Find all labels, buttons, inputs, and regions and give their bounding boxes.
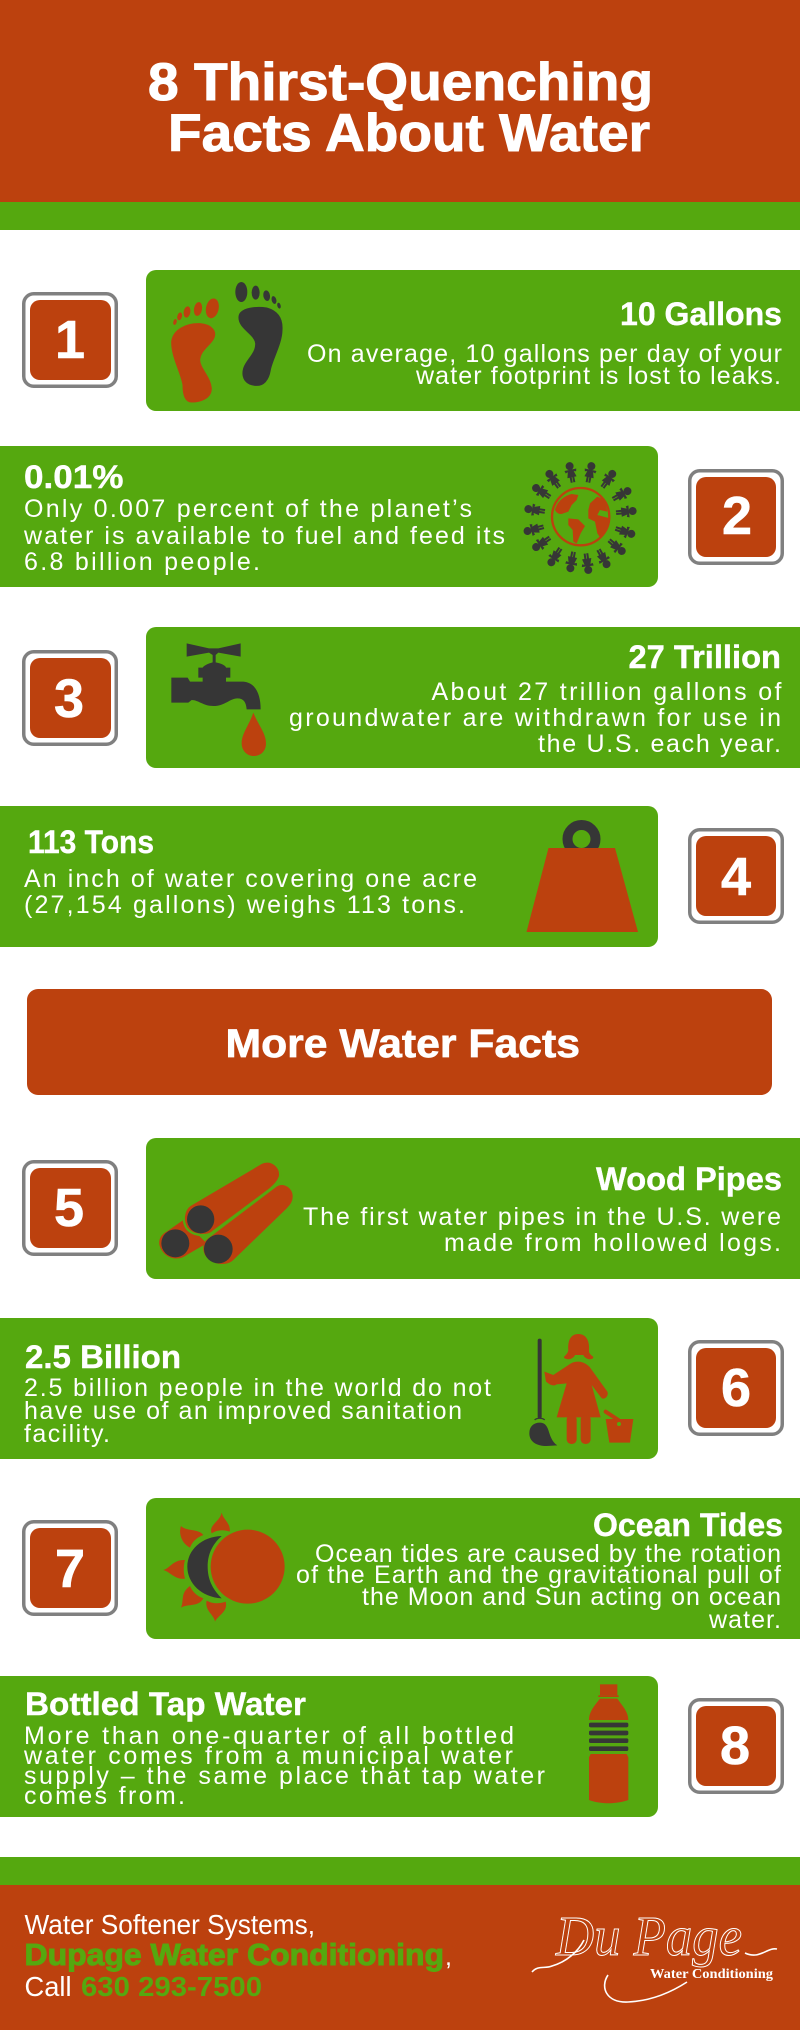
- text block: fact 2: 6.8 billion people.: [24, 548, 260, 576]
- title: [148, 53, 653, 163]
- section banner: More Water Facts: More Water Facts: [226, 1022, 580, 1066]
- heading: 10 Gallons: 10 Gallons: [620, 296, 782, 332]
- heading: 0.01%: 0.01%: [24, 459, 124, 495]
- text block: fact 1: [307, 340, 782, 390]
- header banner: [0, 0, 800, 230]
- text block: fact 5: made from hollowed logs.: [444, 1229, 781, 1257]
- heading: Ocean Tides: Ocean Tides: [593, 1507, 783, 1543]
- number badge 1: [24, 294, 116, 386]
- text block: fact 8: supply – the same place that tap water: [24, 1762, 545, 1790]
- icon: woman with broom and bucket: [529, 1334, 633, 1446]
- number badge 4: [690, 830, 782, 922]
- text block: fact 2: water is available to fuel and feed its: [23, 522, 505, 550]
- panel: fact 2: [0, 446, 658, 587]
- number badge 8: [690, 1700, 782, 1792]
- icon: dripping faucet: [171, 643, 266, 756]
- icon: water bottle: [589, 1684, 628, 1803]
- text block: fact 6: [24, 1374, 491, 1448]
- text block: fact 8: More than one-quarter of all bottled: [24, 1722, 514, 1750]
- panel: fact 3: [146, 627, 800, 768]
- footer band: [0, 1857, 800, 2030]
- section banner: More Water Facts: [27, 989, 772, 1095]
- text block: fact 2: Only 0.007 percent of the planet’s: [24, 495, 472, 523]
- text block: fact 1: On average, 10 gallons per day of your: [307, 340, 782, 368]
- number badge 6: [690, 1342, 782, 1434]
- number badge 3: [24, 652, 116, 744]
- footer contact text: Dupage Water Conditioning: [24, 1937, 444, 1972]
- logo: DuPage Water Conditioning: Water Conditioning: [650, 1967, 773, 1982]
- text block: fact 4: An inch of water covering one acre: [24, 865, 477, 893]
- text block: fact 7: water.: [708, 1606, 781, 1634]
- icon: sun and moon: [163, 1513, 285, 1622]
- logo: DuPage Water Conditioning: [532, 1906, 777, 2002]
- icon: weight: [526, 825, 638, 932]
- number badge 1: 1: [55, 310, 85, 370]
- panel: fact 1: [146, 270, 800, 411]
- title: 8 Thirst-Quenching: [148, 53, 653, 112]
- text block: fact 7: of the Earth and the gravitational pull of: [296, 1561, 781, 1589]
- number badge 3: 3: [54, 669, 84, 729]
- heading: 2.5 Billion: 2.5 Billion: [25, 1339, 181, 1375]
- text block: fact 4: (27,154 gallons) weighs 113 tons.: [24, 891, 465, 919]
- number badge 5: 5: [54, 1178, 84, 1238]
- footer contact text: [24, 1909, 452, 2002]
- heading: 27 Trillion: 27 Trillion: [628, 639, 781, 675]
- panel: fact 5: [146, 1138, 800, 1279]
- text block: fact 4: [24, 865, 477, 919]
- text block: fact 8: [23, 1722, 545, 1810]
- text block: fact 6: 2.5 billion people in the world do not: [24, 1374, 491, 1402]
- text block: fact 7: [296, 1540, 781, 1634]
- number badge 2: 2: [722, 486, 752, 546]
- text block: fact 3: About 27 trillion gallons of: [432, 678, 782, 706]
- text block: fact 7: Ocean tides are caused by the rotation: [315, 1540, 781, 1568]
- text block: fact 7: the Moon and Sun acting on ocean: [362, 1583, 781, 1611]
- icon: wood pipes: [159, 1161, 293, 1264]
- heading: Wood Pipes: Wood Pipes: [596, 1161, 782, 1197]
- footer contact text: Call: [24, 1971, 72, 2002]
- footer contact text: Water Softener Systems,: [24, 1909, 315, 1940]
- title: Facts About Water: [168, 104, 650, 163]
- panel: fact 4: [0, 806, 658, 947]
- icon: globe with ring of children: [522, 461, 637, 575]
- text block: fact 8: comes from.: [24, 1782, 185, 1810]
- heading: 113 Tons: 113 Tons: [28, 824, 154, 860]
- text block: fact 3: groundwater are withdrawn for use in: [289, 704, 781, 732]
- footer contact text: ,: [445, 1943, 452, 1971]
- number badge 2: [690, 471, 782, 563]
- text block: fact 5: [303, 1203, 781, 1257]
- text block: fact 3: the U.S. each year.: [538, 730, 781, 758]
- text block: fact 5: The first water pipes in the U.S. were: [303, 1203, 781, 1231]
- text block: fact 2: [23, 495, 505, 576]
- icon: footprints: [172, 282, 282, 402]
- number badge 5: [24, 1162, 116, 1254]
- footer contact text: 630 293-7500: [81, 1971, 262, 2002]
- number badge 7: [24, 1522, 116, 1614]
- number badge 8: 8: [720, 1716, 750, 1776]
- number badge 6: 6: [721, 1358, 751, 1418]
- text block: fact 3: [289, 678, 782, 758]
- panel: fact 6: [0, 1318, 658, 1459]
- text block: fact 6: have use of an improved sanitation: [24, 1397, 462, 1425]
- text block: fact 8: water comes from a municipal water: [23, 1742, 513, 1770]
- logo: DuPage Water Conditioning: Du Page: [555, 1906, 742, 1968]
- heading: Bottled Tap Water: Bottled Tap Water: [25, 1686, 306, 1722]
- panel: fact 8: [0, 1676, 658, 1817]
- text block: fact 1: water footprint is lost to leaks.: [415, 362, 781, 390]
- number badge 7: 7: [55, 1539, 85, 1599]
- panel: fact 7: [146, 1498, 800, 1639]
- number badge 4: 4: [721, 847, 751, 907]
- text block: fact 6: facility.: [24, 1420, 110, 1448]
